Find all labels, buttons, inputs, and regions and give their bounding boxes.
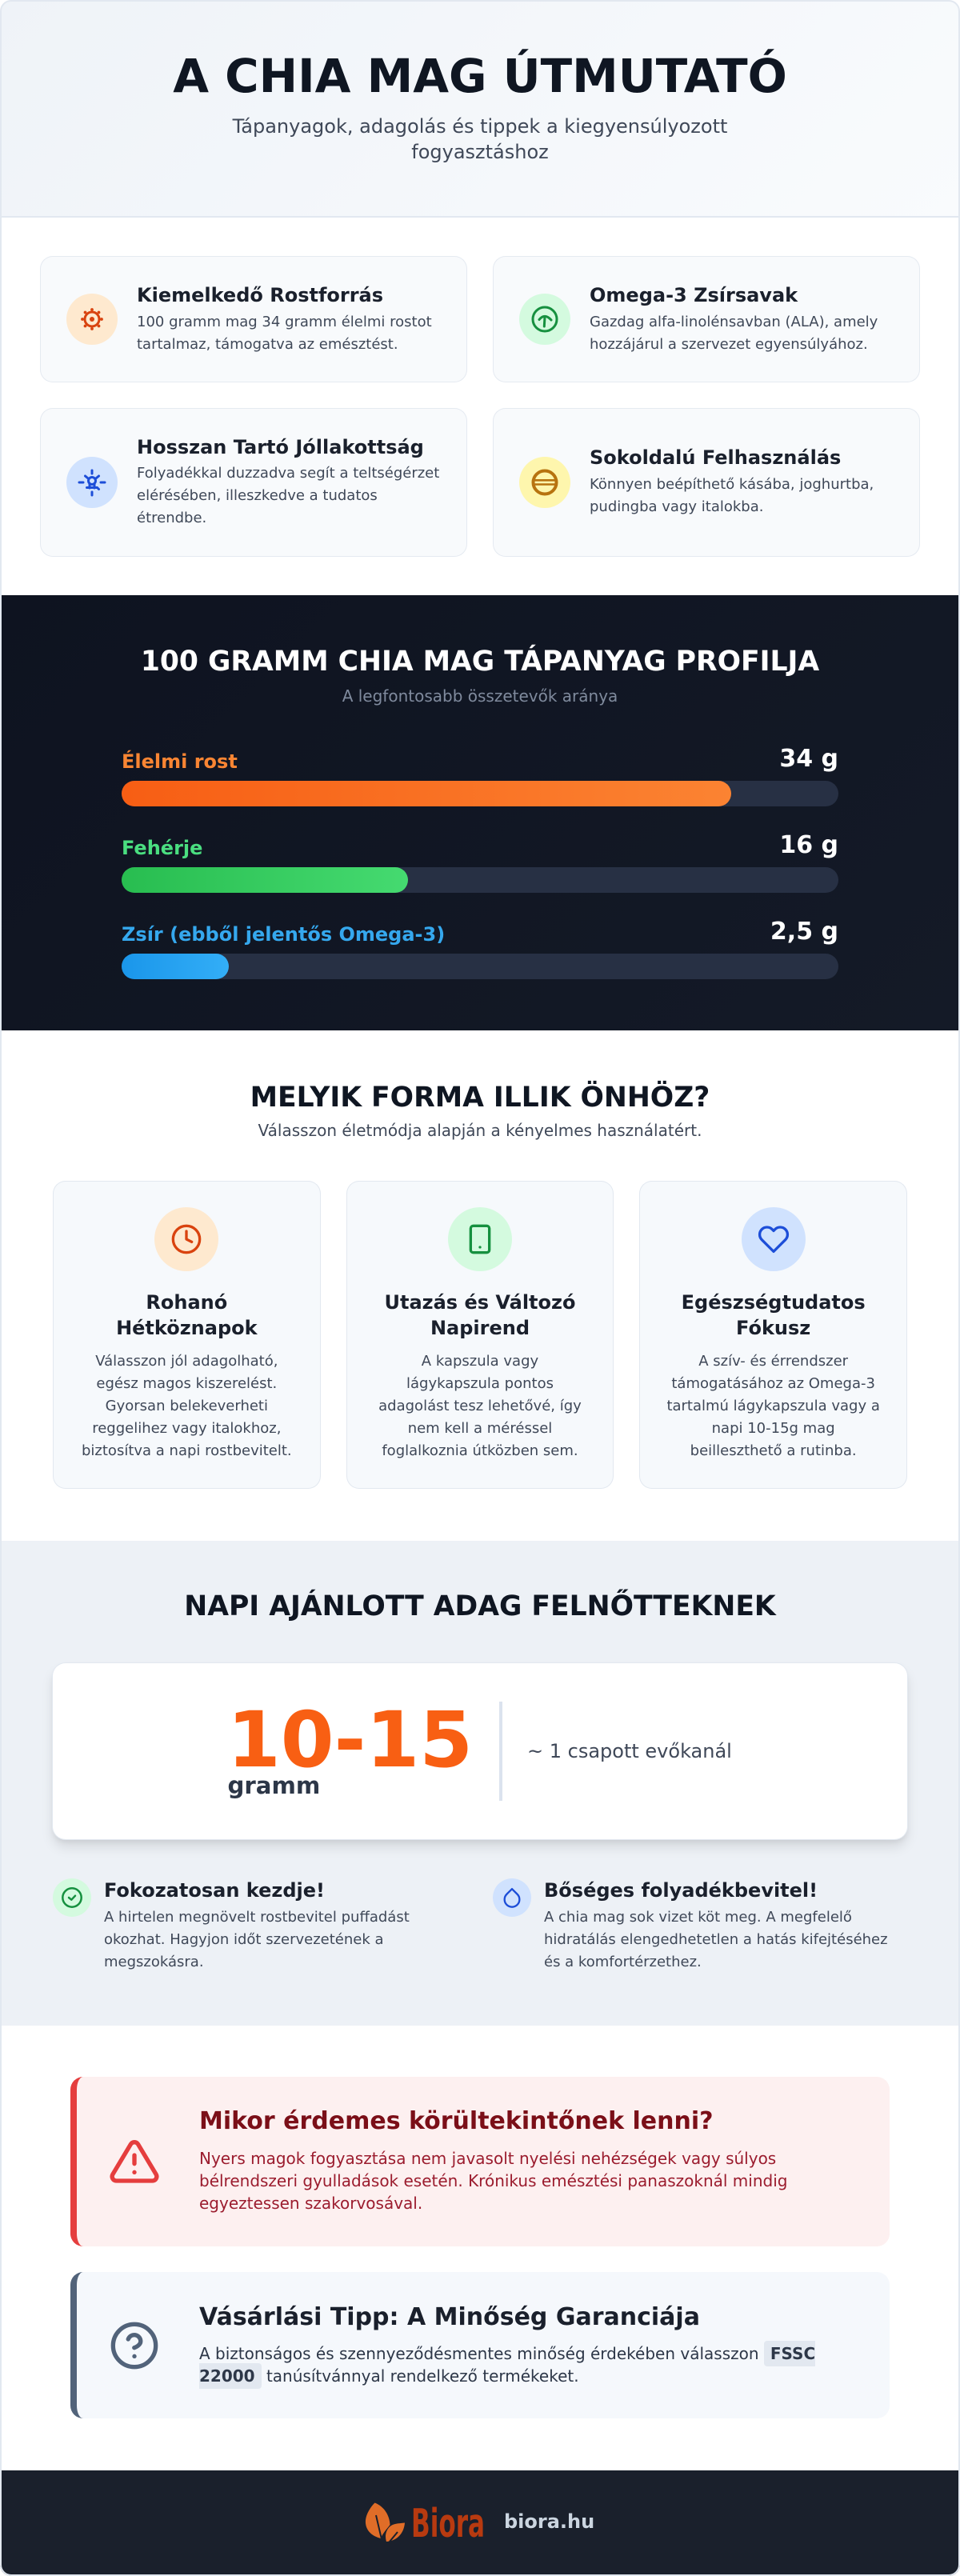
tip title: Bőséges folyadékbevitel! — [544, 1879, 818, 1902]
logo: Biora — [365, 2501, 485, 2546]
card text — [82, 1353, 292, 1459]
card: fiber — [40, 256, 467, 382]
subtitle: Tápanyagok, adagolás és tippek a kiegyensúlyozott — [233, 115, 727, 138]
card text: adagolást tesz lehetővé, így — [378, 1398, 582, 1414]
tip text — [544, 1909, 888, 1970]
card title: Omega-3 Zsírsavak — [590, 284, 798, 306]
card text: pudingba vagy italokba. — [590, 498, 763, 515]
card: health focus — [639, 1181, 907, 1489]
card text: egész magos kiszerelést. — [96, 1375, 277, 1392]
card title — [384, 1291, 575, 1339]
bar: fat — [122, 917, 838, 979]
icon: droplet — [493, 1878, 531, 1917]
card text: foglalkoznia útközben sem. — [382, 1442, 578, 1459]
tip text — [104, 1909, 410, 1970]
icon: phone — [448, 1207, 512, 1271]
bar: fat: Zsír (ebből jelentős Omega-3) — [122, 923, 445, 946]
bar: protein — [122, 830, 838, 893]
card text: nem kell a méréssel — [408, 1420, 552, 1437]
icon: sprout circle — [519, 294, 570, 345]
icon: gear — [66, 294, 118, 345]
icon: warning triangle — [110, 2140, 159, 2183]
callout: caution — [70, 2077, 890, 2246]
callout text: 22000 tanúsítvánnyal rendelkező termékeket. — [199, 2366, 579, 2386]
bar: fiber — [122, 744, 838, 806]
card: omega-3 — [493, 256, 920, 382]
card text: hozzájárul a szervezet egyensúlyához. — [590, 336, 868, 352]
card: versatile — [493, 408, 920, 557]
icon: heart — [742, 1207, 806, 1271]
callout text: Nyers magok fogyasztása nem javasolt nyelési nehézségek vagy súlyos — [199, 2149, 776, 2168]
bar: protein: 16 g — [779, 830, 838, 859]
card text: napi 10-15g mag — [712, 1420, 835, 1437]
panel: nutrient profile — [0, 595, 960, 1030]
tip text: megszokásra. — [104, 1954, 204, 1970]
card text: Gyorsan belekeverheti — [106, 1398, 268, 1414]
callout text: A biztonságos és szennyeződésmentes minőség érdekében válasszon FSSC — [199, 2344, 815, 2363]
card text: A szív- és érrendszer — [698, 1353, 848, 1370]
card title: Egészségtudatos — [682, 1291, 866, 1314]
dose unit: gramm — [227, 1772, 320, 1799]
tip text: hidratálás elengedhetetlen a hatás kifejtéséhez — [544, 1931, 888, 1948]
heading: NAPI AJÁNLOTT ADAG FELNŐTTEKNEK — [184, 1590, 776, 1622]
card title: Hétköznapok — [116, 1317, 258, 1339]
card text: A kapszula vagy — [422, 1353, 538, 1370]
main title: A CHIA MAG ÚTMUTATÓ — [173, 49, 787, 103]
card text — [590, 476, 874, 515]
callout: shopping tip — [70, 2272, 890, 2418]
card: busy weekdays — [53, 1181, 321, 1489]
heading: 100 GRAMM CHIA MAG TÁPANYAG PROFILJA — [141, 646, 819, 678]
card title: Sokoldalú Felhasználás — [590, 446, 841, 469]
panel: daily dose — [0, 1541, 960, 2026]
icon: check — [53, 1878, 91, 1917]
tip title: Fokozatosan kezdje! — [104, 1879, 325, 1902]
card text: reggelihez vagy italokhoz, — [92, 1420, 281, 1437]
card text — [137, 465, 439, 526]
card text — [137, 314, 432, 352]
card text: tartalmú lágykapszula vagy a — [666, 1398, 880, 1414]
subheading: Válasszon életmódja alapján a kényelmes használatért. — [258, 1121, 702, 1140]
card title: Rohanó — [146, 1291, 227, 1314]
icon: question circle — [110, 2322, 158, 2370]
card text — [666, 1353, 880, 1459]
callout text: bélrendszeri gyulladások esetén. Krónikus emésztési panaszoknál mindig — [199, 2171, 787, 2190]
icon: striped circle — [519, 456, 570, 507]
tip: hydration — [493, 1878, 888, 1970]
dose card — [53, 1663, 907, 1839]
website: biora.hu — [504, 2510, 594, 2533]
panel: which form — [0, 1030, 960, 1541]
bar: fiber: 34 g — [779, 744, 838, 773]
card text: Gazdag alfa-linolénsavban (ALA), amely — [590, 314, 878, 330]
card text: támogatásához az Omega-3 — [671, 1375, 875, 1392]
card text: elérésében, illeszkedve a tudatos — [137, 487, 378, 504]
bar: fiber: Élelmi rost — [122, 750, 238, 773]
card title — [116, 1291, 258, 1339]
card text: beilleszthető a rutinba. — [690, 1442, 857, 1459]
card text — [590, 314, 878, 352]
dose number: 10-15 — [227, 1695, 473, 1785]
card text — [378, 1353, 582, 1459]
card text: biztosítva a napi rostbevitelt. — [82, 1442, 292, 1459]
callout title: Vásárlási Tipp: A Minőség Garanciája — [199, 2303, 700, 2331]
card title: Hosszan Tartó Jóllakottság — [137, 436, 424, 458]
dose equivalent: ~ 1 csapott evőkanál — [527, 1739, 732, 1762]
card title — [682, 1291, 866, 1339]
icon: bulb rays — [66, 456, 118, 507]
callout title: Mikor érdemes körültekintőnek lenni? — [199, 2107, 714, 2135]
card text: 100 gramm mag 34 gramm élelmi rostot — [137, 314, 432, 330]
bar: protein: Fehérje — [122, 837, 202, 859]
callout text — [199, 2341, 815, 2389]
icon: clock — [154, 1207, 218, 1271]
card text: tartalmaz, támogatva az emésztést. — [137, 336, 398, 352]
subtitle: fogyasztáshoz — [411, 141, 549, 163]
card text: Folyadékkal duzzadva segít a teltségérzet — [137, 465, 439, 482]
card: travel — [346, 1181, 614, 1489]
card title: Napirend — [430, 1317, 530, 1339]
card title: Kiemelkedő Rostforrás — [137, 284, 383, 306]
subheading: A legfontosabb összetevők aránya — [342, 686, 618, 706]
card text: lágykapszula pontos — [406, 1375, 554, 1392]
card: satiety — [40, 408, 467, 557]
tip text: okozhat. Hagyjon időt szervezetének a — [104, 1931, 384, 1948]
tip text: A chia mag sok vizet köt meg. A megfelelő — [544, 1909, 852, 1926]
card title: Utazás és Változó — [384, 1291, 575, 1314]
heading: MELYIK FORMA ILLIK ÖNHÖZ? — [250, 1082, 710, 1114]
callout text: egyeztessen szakorvosával. — [199, 2194, 422, 2213]
card text: étrendbe. — [137, 510, 206, 526]
tip: start gradually — [53, 1878, 410, 1970]
footer — [0, 2470, 960, 2576]
header section — [0, 0, 960, 218]
panel: callouts — [0, 2026, 960, 2470]
bar: fat: 2,5 g — [770, 917, 838, 946]
panel: key benefits — [0, 218, 960, 595]
card text: Válasszon jól adagolható, — [95, 1353, 278, 1370]
tip text: A hirtelen megnövelt rostbevitel puffadást — [104, 1909, 410, 1926]
tip text: és a komfortérzethez. — [544, 1954, 702, 1970]
card title: Fókusz — [736, 1317, 810, 1339]
callout text — [199, 2149, 787, 2213]
subtitle — [232, 115, 727, 163]
card text: Könnyen beépíthető kásába, joghurtba, — [590, 476, 874, 493]
